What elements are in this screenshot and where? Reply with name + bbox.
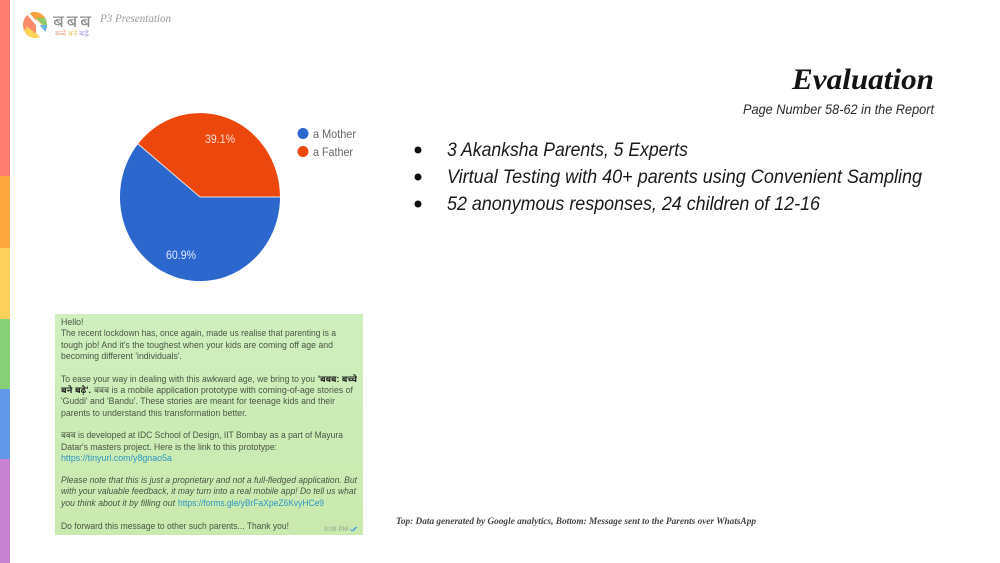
message text: बबब is a mobile application prototype with coming-of-age stories of — [94, 385, 354, 395]
logo wordmark: ब — [53, 12, 64, 31]
title: Evaluation — [791, 63, 934, 96]
bullet list — [414, 139, 922, 215]
message text: Datar's masters project. Here is the link to this prototype: — [61, 442, 277, 452]
message text: The recent lockdown has, once again, made us realise that parenting is a — [61, 328, 336, 338]
rainbow side stripe — [0, 0, 10, 563]
slice: father — [138, 113, 280, 197]
pie chart — [120, 113, 280, 281]
logo tagline — [55, 30, 90, 38]
legend: a Father — [313, 145, 353, 159]
logo tagline: बढ़े — [79, 30, 90, 38]
message text: बबब is developed at IDC School of Design, IIT Bombay as a part of Mayura — [61, 430, 343, 440]
timestamp and read ticks: 9:08 PM — [324, 526, 348, 533]
message text: https://forms.gle/yBrFaXpeZ6KvyHCe9 — [178, 498, 324, 508]
message text: tough job! And it's the toughest when your kids are coming off age and — [61, 340, 333, 350]
bullet list: Virtual Testing with 40+ parents using Convenient Sampling — [447, 166, 922, 188]
label: mother share: 60.9% — [166, 250, 196, 262]
message text: you think about it by filling out — [60, 498, 176, 508]
legend — [298, 127, 356, 159]
message text: 'बबब: बच्चे — [318, 372, 358, 384]
message text: Do forward this message to other such parents... Thank you! — [61, 521, 289, 531]
logo — [23, 12, 92, 38]
bullet list: 3 Akanksha Parents, 5 Experts — [447, 139, 688, 161]
logo wordmark: ब — [66, 12, 78, 31]
icon: logo mark — [23, 12, 47, 38]
caption: Top: Data generated by Google analytics, Bottom: Message sent to the Parents over WhatsApp — [396, 517, 756, 527]
message text: Hello! — [61, 317, 84, 327]
label: father share: 39.1% — [205, 134, 235, 146]
logo wordmark: ब — [80, 12, 91, 31]
header label: P3 Presentation — [99, 13, 171, 25]
logo tagline: बने — [68, 30, 77, 38]
legend: a Mother — [313, 127, 356, 141]
bullet list: 52 anonymous responses, 24 children of 12-16 — [447, 193, 820, 215]
message text: with your valuable feedback, it may turn into a real mobile app! Do tell us what — [61, 486, 357, 496]
logo tagline: बच्चे — [55, 30, 67, 38]
message text: बने बढ़े'. — [61, 383, 91, 396]
message text: Please note that this is just a proprietary and not a full-fledged application. But — [61, 475, 358, 485]
message text: becoming different 'individuals'. — [61, 351, 182, 361]
message text: 'Guddi' and 'Bandu'. These stories are meant for teenage kids and their — [61, 396, 335, 406]
message text: To ease your way in dealing with this awkward age, we bring to you — [61, 374, 315, 384]
message text: https://tinyurl.com/y8gnao5a — [61, 453, 172, 463]
message text: parents to understand this transformation better. — [61, 408, 247, 418]
message text — [60, 317, 358, 531]
whatsapp message screenshot — [55, 314, 363, 535]
logo wordmark — [53, 12, 91, 31]
subtitle: page reference: Page Number 58-62 in the Report — [743, 101, 935, 117]
slice: mother — [120, 144, 280, 281]
